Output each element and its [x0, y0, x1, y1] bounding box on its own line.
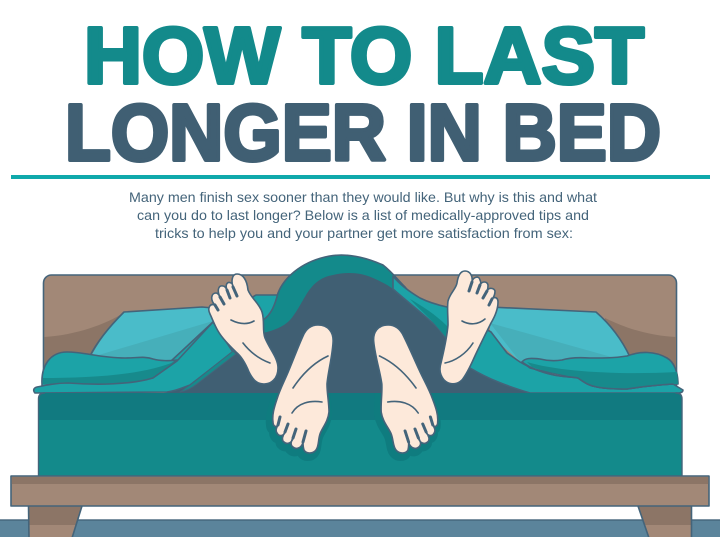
intro text: [129, 189, 597, 241]
bed frame: [11, 476, 709, 506]
blanket centre hump: [263, 255, 450, 345]
foot lower left: [273, 325, 333, 453]
blanket fold left: [34, 322, 236, 393]
intro text: Many men finish sex sooner than they would like. But why is this and what: [129, 189, 597, 205]
foot lower right: [373, 325, 439, 453]
intro text: can you do to last longer? Below is a list of medically-approved tips and: [137, 207, 589, 223]
mattress: [38, 393, 682, 476]
bed leg left: [28, 506, 82, 537]
blanket strip left: [165, 295, 279, 392]
pillow left: [88, 307, 213, 362]
title: how to last: HOW TO LAST: [84, 11, 644, 100]
title: longer in bed: LONGER IN BED: [65, 88, 661, 177]
pillow right: [490, 307, 630, 366]
foot upper left: [209, 274, 278, 384]
floor band: [0, 520, 720, 537]
intro text: tricks to help you and your partner get more satisfaction from sex:: [155, 225, 573, 241]
bed leg right: [638, 506, 692, 537]
headboard: [44, 275, 676, 400]
foot shadows on mattress: [266, 420, 440, 461]
blanket fold right: [393, 276, 683, 393]
body under blanket: [165, 273, 530, 393]
foot upper right: [440, 271, 498, 384]
title divider: [11, 175, 710, 179]
